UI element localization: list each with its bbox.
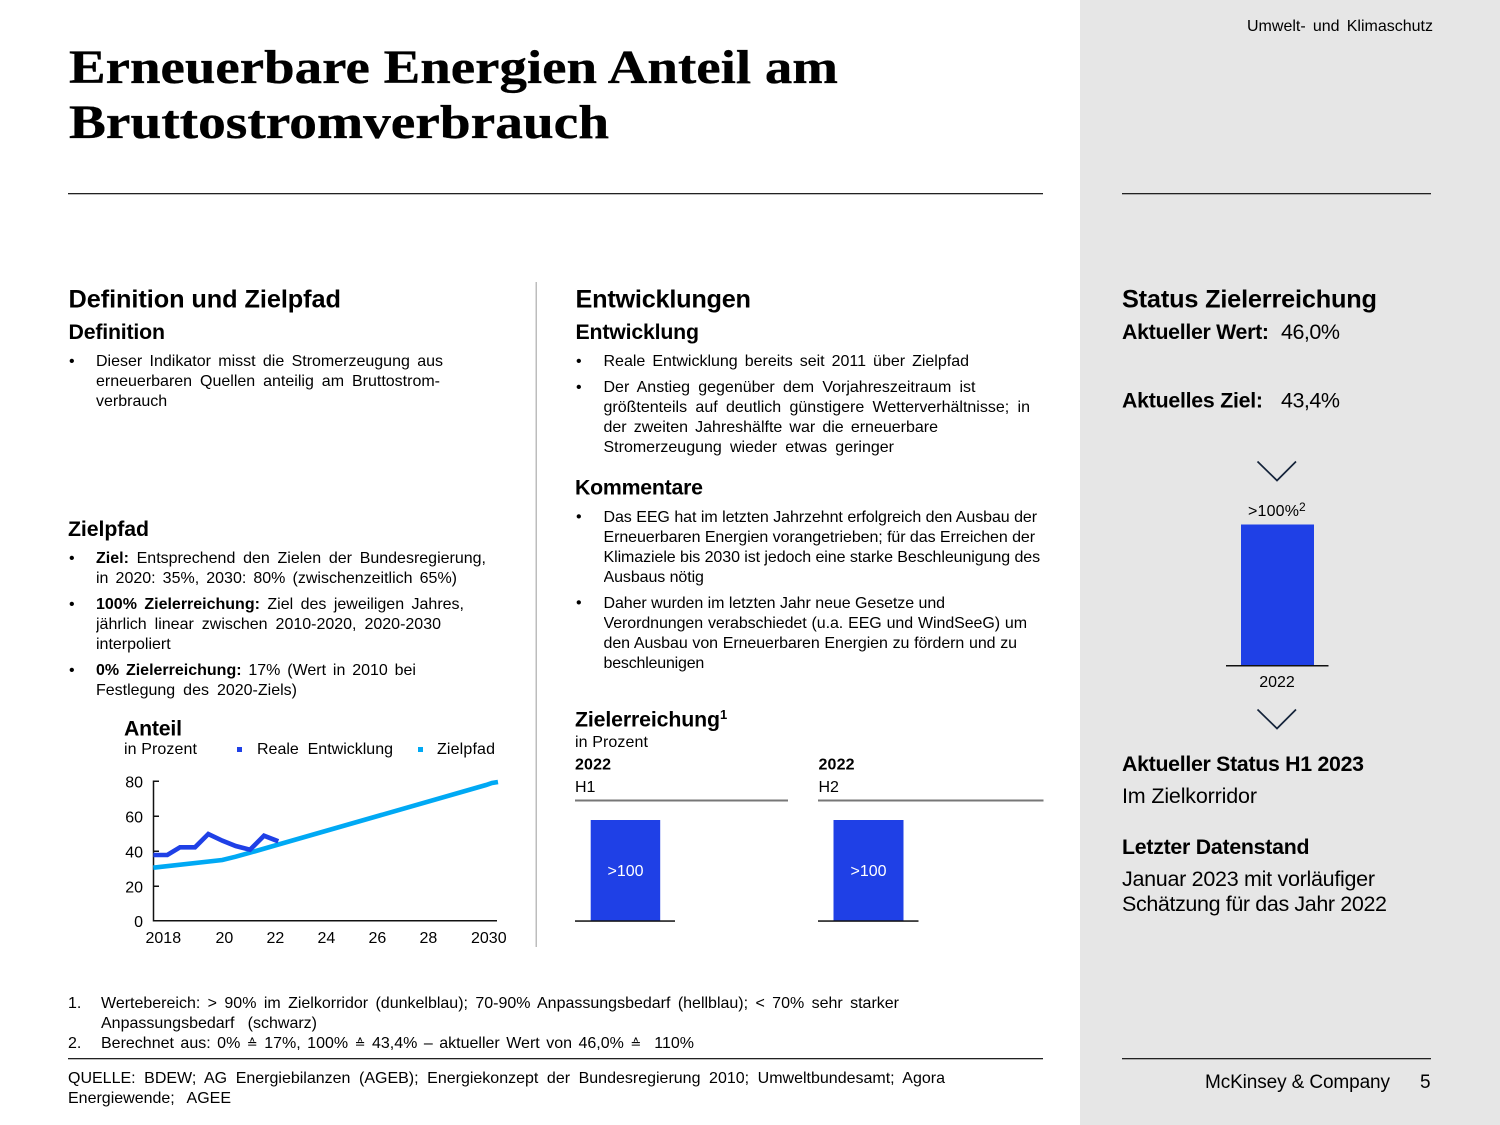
last data status: Letzter Datenstand [1122, 835, 1310, 859]
text block: Entwicklung: • [576, 379, 582, 396]
text block: Kommentare: • [576, 508, 582, 526]
x axis labels [146, 930, 507, 947]
text block: Zielpfad: • [69, 662, 75, 679]
x axis labels: 22 [266, 930, 284, 947]
x axis labels: 2018 [146, 930, 181, 947]
bar chart: Zielerreichung: in Prozent [575, 734, 649, 751]
text block: Definition [69, 352, 516, 412]
current status [1122, 752, 1364, 808]
text block: Kommentare [576, 508, 1054, 680]
text block: Zielpfad: • [69, 596, 75, 613]
chart legend [237, 740, 495, 760]
text block: Kommentare: Daher wurden im letzten Jahr neue Gesetze und [604, 595, 945, 612]
x axis labels: 26 [368, 930, 386, 947]
bar chart: status 2022: >100% [1248, 503, 1299, 520]
text block: Entwicklung: größtenteils auf deutlich günstigere Wetterverhältnisse; in [604, 399, 1030, 416]
footnotes [68, 994, 931, 1054]
x axis labels: 2030 [471, 930, 507, 947]
subheading: Kommentare: Kommentare [575, 476, 703, 500]
section label: Umwelt- und Klimaschutz [1247, 18, 1433, 35]
y axis labels: 20 [125, 880, 143, 896]
text block: Entwicklung: • [576, 353, 582, 370]
column: 2022 H1 [575, 756, 788, 922]
title: Erneuerbare Energien Anteil am [69, 41, 838, 94]
current value: 46,0% [1281, 320, 1340, 344]
text block: Zielpfad: 0% Zielerreichung: 17% (Wert in 2010 bei [96, 662, 416, 679]
text block: Kommentare: Verordnungen verabschiedet (u.a. EEG und WindSeeG) um [604, 615, 1027, 632]
panel: Definition und Zielpfad [68, 286, 516, 701]
subheading: Zielpfad: Zielpfad [68, 517, 149, 541]
column: 2022 H2: 2022 [818, 756, 855, 774]
x axis labels: 24 [318, 930, 335, 947]
y axis labels [125, 774, 143, 931]
line: Reale Entwicklung [153, 834, 278, 855]
y axis labels: 80 [125, 774, 143, 792]
current value: Aktueller Wert: [1122, 320, 1269, 344]
text block: Entwicklung: Stromerzeugung wieder etwas geringer [604, 439, 894, 456]
text block: Definition: • [69, 353, 75, 370]
source [68, 1069, 968, 1109]
icon: chevron down [1258, 462, 1296, 480]
column: 2022 H2 [818, 756, 1044, 922]
text block: Zielpfad: interpoliert [96, 636, 171, 653]
text block: Zielpfad: Festlegung des 2020-Ziels) [96, 682, 297, 699]
heading: Definition und Zielpfad: Definition und Zielpfad [68, 286, 341, 314]
text block: Definition: Dieser Indikator misst die Stromerzeugung aus [96, 353, 443, 370]
current target: Aktuelles Ziel: [1122, 388, 1263, 412]
panel: Entwicklungen [575, 286, 1054, 680]
bar chart: status 2022: 2022 [1259, 674, 1295, 691]
text block: Kommentare: • [576, 594, 582, 612]
panel: Status Zielerreichung [1122, 286, 1387, 916]
bar chart: status 2022 [1226, 500, 1328, 691]
text block: Kommentare: Ausbaus nötig [604, 569, 704, 586]
chart legend: Zielpfad [437, 741, 495, 758]
footer: branding and page number: McKinsey & Company [1205, 1072, 1390, 1093]
x axis labels: 20 [216, 930, 233, 947]
text block: Kommentare: Erneuerbaren Energien vorangetrieben; für das Erreichen der [604, 529, 1035, 546]
footnotes: Anpassungsbedarf (schwarz) [101, 1015, 317, 1032]
text block: Zielpfad [69, 549, 516, 701]
text block: Kommentare: den Ausbau von Erneuerbaren Energien zu fördern und zu [604, 635, 1017, 652]
subheading: Entwicklung: Entwicklung [576, 320, 699, 344]
panel: right sidebar background [1080, 0, 1500, 1125]
text block: Zielpfad: jährlich linear zwischen 2010-2020, 2020-2030 [96, 616, 441, 633]
heading: Status Zielerreichung: Status Zielerreichung [1122, 286, 1377, 314]
chart heading: Zielerreichung [575, 708, 720, 732]
last data status: Schätzung für das Jahr 2022 [1122, 892, 1387, 916]
text block: Zielpfad: Ziel: Entsprechend den Zielen der Bundesregierung, [96, 550, 486, 567]
column: 2022 H2: >100 [850, 863, 887, 880]
current status: Im Zielkorridor [1122, 784, 1257, 808]
chart heading: Anteil [124, 716, 182, 740]
text block: Kommentare: Das EEG hat im letzten Jahrzehnt erfolgreich den Ausbau der [604, 509, 1037, 526]
bar chart: status 2022: 2 [1299, 500, 1306, 514]
source: QUELLE: BDEW; AG Energiebilanzen (AGEB); Energiekonzept der Bundesregierung 2010; Umweltbundesamt; Agora [68, 1070, 945, 1087]
line: Zielpfad [153, 782, 498, 868]
chart legend: Reale Entwicklung [257, 741, 393, 758]
text block: Zielpfad: • [69, 550, 75, 567]
source: Energiewende; AGEE [68, 1090, 231, 1107]
footnotes: 2. [68, 1035, 81, 1052]
footnotes: 1. [68, 995, 81, 1012]
footnotes: Wertebereich: > 90% im Zielkorridor (dunkelblau); 70-90% Anpassungsbedarf (hellblau); < 70% sehr starker [101, 995, 899, 1012]
current target [1122, 388, 1340, 412]
text block: Entwicklung: der zweiten Jahreshälfte war die erneuerbare [604, 419, 938, 436]
text block: Entwicklung [576, 352, 1054, 458]
y axis labels: 60 [125, 810, 143, 826]
column: 2022 H1: 2022 [575, 756, 611, 774]
heading: Entwicklungen: Entwicklungen [576, 286, 751, 314]
column: 2022 H2: H2 [818, 779, 839, 796]
current value [1122, 320, 1340, 344]
icon: chevron down [1258, 710, 1296, 728]
title [69, 41, 838, 149]
line chart: Anteil: in Prozent [124, 741, 198, 758]
footnotes: Berechnet aus: 0% ≙ 17%, 100% ≙ 43,4% – aktueller Wert von 46,0% ≙ 110% [101, 1035, 694, 1052]
chart axes [154, 781, 497, 921]
x axis labels: 28 [420, 930, 437, 947]
text block: Kommentare: Klimaziele bis 2030 ist jedoch eine starke Beschleunigung des [604, 549, 1040, 566]
text block: Definition: verbrauch [96, 393, 167, 410]
text block: Entwicklung: Reale Entwicklung bereits seit 2011 über Zielpfad [604, 353, 969, 370]
text block: Kommentare: beschleunigen [604, 655, 704, 672]
footer: branding and page number: 5 [1420, 1072, 1431, 1093]
subheading: Definition: Definition [68, 320, 165, 344]
bar chart: Zielerreichung: 1 [720, 707, 727, 722]
text block: Entwicklung: Der Anstieg gegenüber dem Vorjahreszeitraum ist [604, 379, 976, 396]
last data status [1122, 835, 1387, 916]
y axis labels: 0 [134, 914, 143, 931]
text block: Definition: erneuerbaren Quellen anteilig am Bruttostrom- [96, 373, 440, 390]
text block: Zielpfad: 100% Zielerreichung: Ziel des jeweiligen Jahres, [96, 596, 464, 613]
column: 2022 H1: >100 [607, 863, 644, 880]
current status: Aktueller Status H1 2023 [1122, 752, 1364, 776]
title: Bruttostromverbrauch [69, 96, 609, 149]
y axis labels: 40 [125, 844, 143, 862]
line chart: Anteil [124, 716, 507, 947]
column: 2022 H1: H1 [575, 779, 596, 796]
text block: Zielpfad: in 2020: 35%, 2030: 80% (zwischenzeitlich 65%) [96, 570, 457, 587]
current target: 43,4% [1281, 388, 1340, 412]
last data status: Januar 2023 mit vorläufiger [1122, 867, 1375, 891]
bar chart: Zielerreichung [575, 707, 1044, 922]
